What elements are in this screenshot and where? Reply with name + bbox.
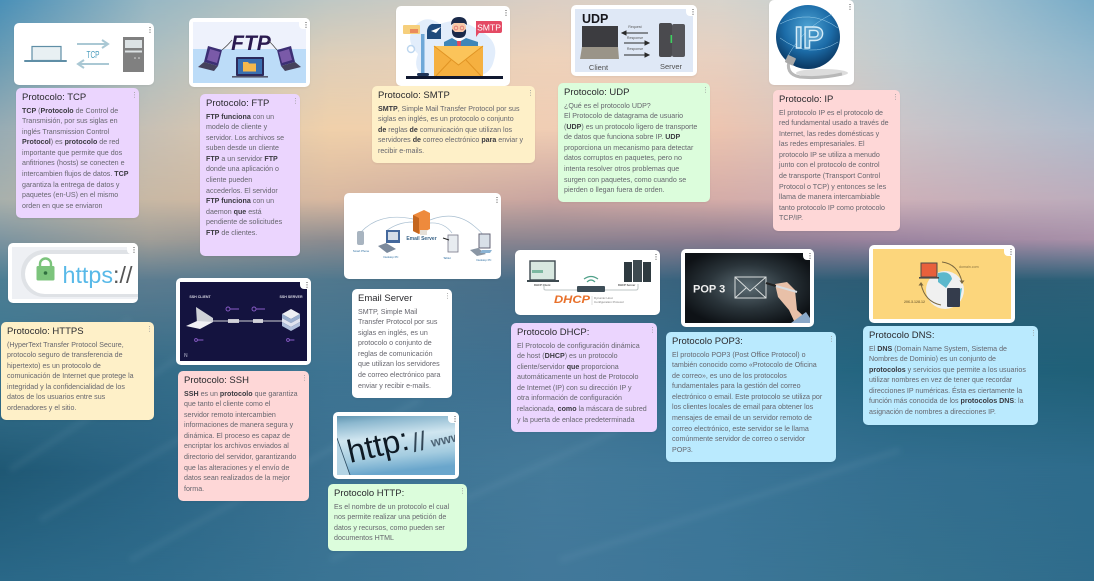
image: email server diagram: Smart Phone <box>353 249 370 253</box>
heading: Email Server: Email Server <box>358 292 412 304</box>
text: TCP description: garantiza la entrega de datos y <box>22 181 119 189</box>
text: UDP description: El Protocolo de datagrama de usuario <box>564 112 683 120</box>
image: email server diagram: Desktop PC <box>477 258 491 262</box>
text: SMTP description: siglas en inglés, es un protocolo o conjunto <box>378 115 514 123</box>
text: SSH description: dinámica. El proceso es capaz de <box>184 432 290 440</box>
text: SSH description: informaciones de manera segura y <box>184 421 293 429</box>
text: POP3 description: de correo», es uno de los protocolos <box>672 372 787 380</box>
text: SSH description: que las alteraciones y el envío de <box>184 464 289 472</box>
text: HTTPS description: ordenadores y el sitio. <box>7 404 76 412</box>
text: DHCP description <box>517 342 647 424</box>
image: HTTP address bar <box>333 412 459 479</box>
text: UDP description: surgen con paquetes, como cuando se <box>564 176 686 184</box>
image: DNS illustration: domain.com <box>959 265 979 269</box>
image: email server diagram: Desktop PC <box>384 255 398 259</box>
text: HTTPS description: datos de los usuarios entre sus <box>7 393 105 401</box>
image: DHCP diagram: Configuration Protocol <box>594 300 624 304</box>
text: DHCP description: El Protocolo de configuración dinámica <box>517 342 640 350</box>
image: DHCP diagram: DHCP Client <box>534 283 550 287</box>
text: IP description: las redes empresariales. El <box>779 140 865 148</box>
text: UDP description: pierden o llegan fuera de orden. <box>564 186 665 194</box>
text: SSH description: datos sean realizados de la mejor <box>184 474 290 482</box>
image: SSH diagram: SSH CLIENT <box>189 295 211 299</box>
image: UDP diagram: Response <box>627 47 643 51</box>
heading: TCP: Protocolo: TCP <box>22 92 86 102</box>
panel: FTP note <box>200 94 300 256</box>
image: UDP diagram: Server <box>660 62 683 71</box>
image: DHCP diagram: DHCP <box>554 294 591 306</box>
text: IP description: red fundamental usado a través de <box>779 119 889 127</box>
image: UDP diagram: Client <box>589 63 609 72</box>
text: IP description: TCP/IP. <box>779 214 803 222</box>
text: DHCP description: automáticamente un host de Protocolo <box>517 373 638 381</box>
text: IP description: de transporte (Transport Control <box>779 172 880 180</box>
heading: IP: Protocolo: IP <box>779 94 833 104</box>
image: SMTP illustration: SMTP <box>477 22 501 32</box>
image: SSH diagram: N <box>184 353 188 359</box>
text: POP3 description: mensajes de email de un servidor remoto de <box>672 414 812 422</box>
text: POP3 description: correo electrónico, este servidor se le llama <box>672 425 809 433</box>
image: POP3 illustration <box>681 249 814 327</box>
text: HTTP description: documentos HTML <box>334 534 394 542</box>
image: TCP diagram <box>14 23 154 85</box>
text: FTP description: modelo de cliente y <box>206 123 267 131</box>
text: DNS description: utilizar nombres en vez de tener que recordar <box>869 376 1012 384</box>
text: HTTPS description: comunicación de Internet que protege la <box>7 372 134 380</box>
text: UDP description: intenta resolver otros problemas que <box>564 165 679 173</box>
panel: HTTPS note <box>1 322 154 420</box>
image: SMTP illustration <box>396 6 510 86</box>
text: FTP description: FTP a un servidor FTP <box>206 155 278 163</box>
text: HTTP description: nos permite realizar una petición de <box>334 513 446 521</box>
text: SMTP description: servidores de correo electrónico para enviar y <box>378 136 523 144</box>
image: UDP diagram <box>571 5 697 76</box>
text: SSH description: SSH es un protocolo que garantiza <box>184 390 298 398</box>
image: IP globe: IP <box>794 20 824 55</box>
panel: UDP note <box>558 83 710 202</box>
text: FTP description: suben desde un cliente <box>206 144 279 152</box>
text: UDP description <box>564 102 697 194</box>
text: HTTPS description: protocolo seguro de transferencia de <box>7 351 123 359</box>
image: HTTP address bar: // <box>409 425 430 458</box>
image: email server diagram: Tablet <box>443 256 451 260</box>
text: FTP description: pendiente de solicitudes <box>206 218 282 226</box>
text: HTTP description <box>334 503 449 542</box>
image: TCP diagram: TCP <box>86 50 100 61</box>
text: TCP description: orden en que se enviaron <box>22 202 102 210</box>
image: FTP illustration <box>189 18 310 87</box>
text: HTTPS description: (HyperText Transfer Protocol Secure, <box>7 341 124 349</box>
text: FTP description: servidor. Los archivos se <box>206 134 284 142</box>
text: DNS description: El DNS (Domain Name System, Sistema de <box>869 345 1007 353</box>
heading: SMTP: Protocolo: SMTP <box>378 90 450 100</box>
image: email server diagram <box>344 193 501 279</box>
text: HTTP description: Es el nombre de un protocolo el cual <box>334 503 449 511</box>
text: DHCP description: cliente/servidor que proporciona <box>517 363 619 371</box>
text: TCP description: importante que permite que dos <box>22 149 122 157</box>
heading: DNS: Protocolo DNS: <box>869 330 934 340</box>
text: IP description: llama de manera intercambiable <box>779 193 880 201</box>
text: TCP description: anfitriones (hosts) se conecten e <box>22 159 125 167</box>
image: UDP diagram: Request <box>628 25 642 29</box>
panel: IP note <box>773 90 900 231</box>
panel: DNS note <box>863 326 1038 425</box>
panel: POP3 note <box>666 332 836 462</box>
text: UDP description: (UDP) es un protocolo ligero de transporte <box>564 123 697 131</box>
text: SSH description: que tanto el cliente como el <box>184 400 270 408</box>
panel: HTTP note <box>328 484 467 551</box>
text: FTP description: FTP funciona con un <box>206 113 274 121</box>
heading: FTP: Protocolo: FTP <box>206 98 269 108</box>
text: DHCP description: relacionada, como la máscara de subred <box>517 405 647 413</box>
heading: HTTPS: Protocolo: HTTPS <box>7 326 84 336</box>
text: TCP description: paquetes (en-US) en el mismo <box>22 191 118 199</box>
text: SMTP description: de reglas de comunicación que utilizan los <box>378 126 512 134</box>
text: SMTP description <box>378 105 523 155</box>
text: FTP description: cliente pueden <box>206 176 252 184</box>
text: TCP description: Protocol) es protocolo de red <box>22 138 119 146</box>
text: TCP description: TCP (Protocolo de Control de <box>22 107 118 115</box>
heading: HTTP: Protocolo HTTP: <box>334 488 404 498</box>
text: SSH description: forma. <box>184 485 204 493</box>
text: FTP description: FTP de clientes. <box>206 229 257 237</box>
text: DNS description: protocolos y servicios que permite a los usuarios <box>869 366 1026 374</box>
text: POP3 description <box>672 351 822 454</box>
text: IP description: Internet, las redes domésticas y <box>779 130 879 138</box>
text: HTTPS description: integridad y la confidencialidad de los <box>7 383 125 391</box>
text: Email Server description: protocolo o conjunto de <box>358 339 432 347</box>
text: POP3 description: los clientes locales de email para obtener los <box>672 403 813 411</box>
image: IP globe <box>769 0 854 85</box>
text: DHCP description: de host (DHCP) es un protocolo <box>517 352 618 360</box>
text: TCP description: Transmisión, por sus siglas en <box>22 117 118 125</box>
panel: DHCP note <box>511 323 657 432</box>
image: HTTPS address bar: https:// <box>62 262 133 288</box>
text: Email Server description: siglas en inglés, es un <box>358 329 428 337</box>
text: SSH description: encriptar los archivos enviados al <box>184 442 289 450</box>
image: DNS illustration: 206.3.128.12 <box>904 300 925 304</box>
heading: SSH: Protocolo: SSH <box>184 374 249 386</box>
image: HTTPS address bar <box>8 243 138 303</box>
text: DNS description: función más conocida de los protocolos DNS: la <box>869 397 1024 405</box>
text: IP description <box>778 109 889 222</box>
text: Email Server description: enviar y recibir e-mails. <box>358 382 431 390</box>
text: HTTP description: datos y recursos, como pueden ser <box>334 524 445 532</box>
text: DNS description <box>869 345 1026 416</box>
text: UDP description: ¿Qué es el protocolo UDP? <box>564 102 651 110</box>
text: Email Server description: reglas de comunicación <box>358 350 433 358</box>
text: DHCP description: y la puerta de enlace predeterminada <box>517 416 635 424</box>
text: POP3 description: electrónico o email. Este protocolo se utiliza por <box>672 393 822 401</box>
text: DNS description: asignación de nombres a direcciones IP. <box>869 408 996 416</box>
image: UDP diagram: Response <box>627 36 643 40</box>
text: POP3 description: POP3. <box>672 446 693 454</box>
text: TCP description <box>22 107 128 210</box>
text: FTP description: donde una aplicación o <box>206 165 279 173</box>
image: SSH diagram <box>176 278 311 365</box>
text: SSH description <box>184 390 298 493</box>
panel: TCP note <box>16 88 139 218</box>
image: FTP illustration: FTP <box>231 32 272 55</box>
image: HTTP address bar: http: <box>343 421 412 470</box>
text: IP description: tanto protocolo IP como protocolo <box>779 204 885 212</box>
text: POP3 description: fundamentales para la gestión del correo <box>672 382 801 390</box>
text: HTTPS description: hipertexto) es un protocolo de <box>7 362 101 370</box>
text: IP description: Protocol o TCP) y entonces se les <box>779 183 886 191</box>
text: Email Server description <box>358 308 440 390</box>
text: Email Server description: que utilizan los servidores <box>358 360 440 368</box>
text: FTP description: accederlos. El servidor <box>206 187 278 195</box>
text: UDP description: de datos que funciona sobre IP. UDP <box>564 133 680 141</box>
image: email server diagram: Email Server <box>406 236 437 242</box>
text: DHCP description: otra información de configuración <box>517 394 622 402</box>
panel: SMTP note <box>372 86 535 163</box>
text: Email Server description: Transfer Protocol por sus <box>358 318 437 326</box>
text: POP3 description: El protocolo POP3 (Post Office Protocol) o <box>672 351 806 359</box>
text: DNS description: direcciones IP numéricas. Ésta es ciertamente la <box>869 387 1022 395</box>
image: POP3 illustration: POP 3 <box>693 284 725 296</box>
text: FTP description: FTP funciona con un <box>206 197 274 205</box>
text: DNS description: Nombres de Dominio) es un conjunto de <box>869 355 996 363</box>
text: SSH description: directorio del servidor, garantizando <box>184 453 296 461</box>
text: TCP description: inglés Transmission Control <box>22 128 109 136</box>
panel: SSH note <box>178 371 309 501</box>
text: SMTP description: SMTP, Simple Mail Transfer Protocol por sus <box>378 105 520 113</box>
heading: DHCP: Protocolo DHCP: <box>517 326 589 338</box>
image: SSH diagram: SSH SERVER <box>279 295 303 299</box>
heading: POP3: Protocolo POP3: <box>672 336 743 346</box>
text: IP description: junto con el protocolo de control <box>779 161 880 169</box>
image: DHCP diagram: Dynamic Host <box>594 296 613 300</box>
text: POP3 description: comúnmente servidor de correo o servidor <box>672 435 805 443</box>
image: DHCP diagram <box>515 250 660 315</box>
text: HTTPS description <box>7 341 134 412</box>
text: IP description: protocolo IP se utiliza a menudo <box>779 151 880 159</box>
text: SMTP description: recibir e-mails. <box>378 147 424 155</box>
text: UDP description: datos corruptos en paquetes, pero no <box>564 154 682 162</box>
panel: Email Server note <box>352 289 452 398</box>
image: DHCP diagram: DHCP Server <box>618 283 636 287</box>
text: FTP description: daemon que está <box>206 208 262 216</box>
text: UDP description: proporciona un mecanismo para detectar <box>564 144 693 152</box>
text: IP description: El protocolo IP es el protocolo de <box>779 109 883 117</box>
text: Email Server description: de correo electrónico para <box>358 371 440 379</box>
text: DHCP description: de Internet (IP) con su dirección IP y <box>517 384 632 392</box>
text: SSH description: servidor remoto intercambien <box>184 411 276 419</box>
text: TCP description: intercambien flujos de datos. TCP <box>22 170 128 178</box>
image: DNS illustration <box>869 245 1015 323</box>
text: POP3 description: también conocido como «Protocolo de Oficina <box>672 361 817 369</box>
heading: UDP: Protocolo: UDP <box>564 86 629 98</box>
text: Email Server description: SMTP, Simple Mail <box>358 308 417 316</box>
text: FTP description <box>206 113 284 237</box>
image: UDP diagram: UDP <box>582 12 608 26</box>
